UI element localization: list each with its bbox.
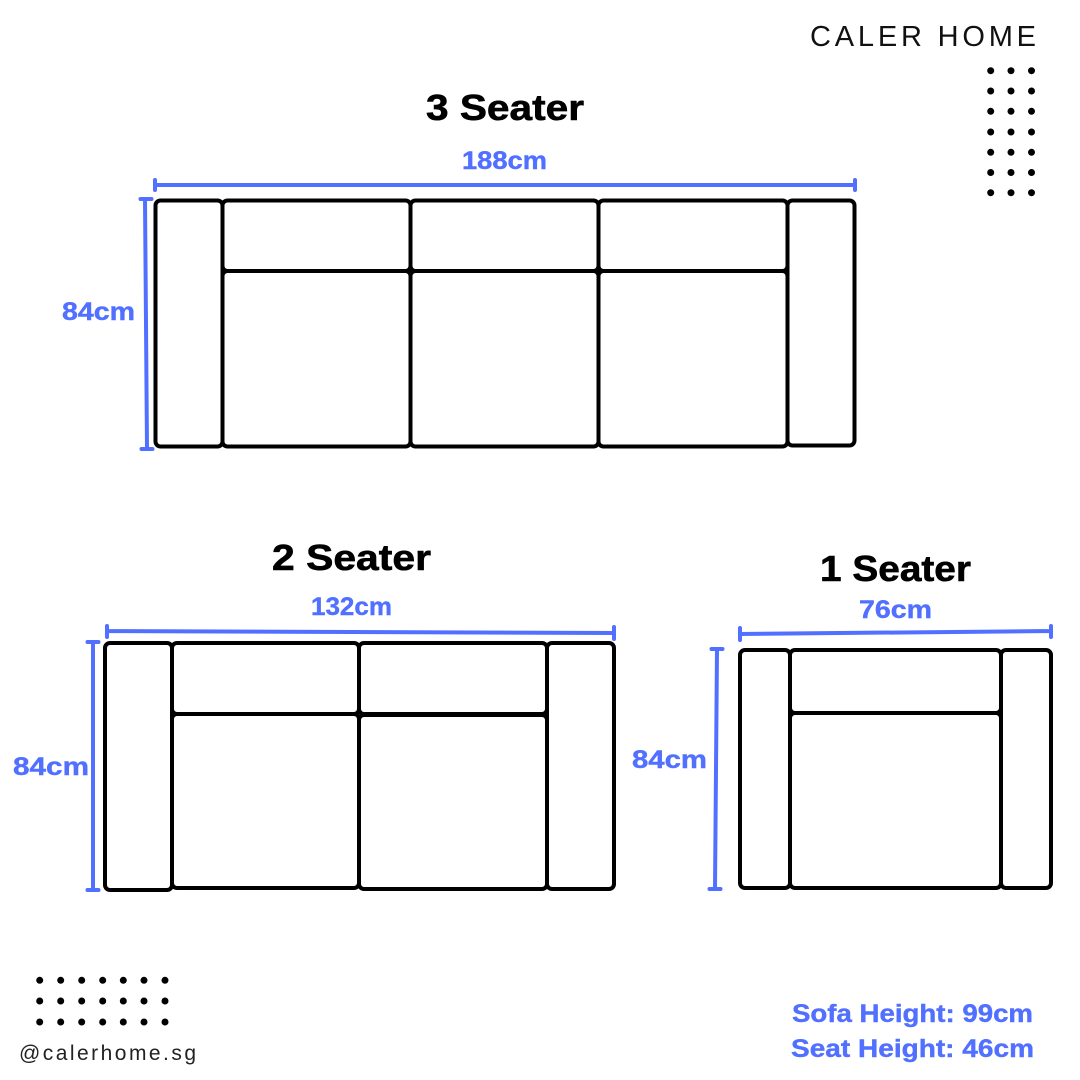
brand name: CALER HOME <box>810 21 1036 53</box>
width label: 76cm: 76cm <box>859 596 932 624</box>
heading: 3 Seater: 3 Seater <box>426 87 584 128</box>
width dimension line: 2 seater <box>107 626 614 639</box>
width dimension line: 1 seater <box>740 626 1051 640</box>
social handle: @calerhome.sg <box>19 1042 196 1065</box>
seat height note: Seat Height: 46cm <box>791 1035 1034 1063</box>
heading: 2 Seater: 2 Seater <box>272 537 431 578</box>
heading: 1 Seater: 1 Seater <box>820 548 971 589</box>
width dimension line: 3 seater <box>155 180 855 190</box>
height dimension line: 2 seater <box>88 642 98 890</box>
height label: 1 seater 84cm: 84cm <box>632 746 707 774</box>
width label: 188cm: 188cm <box>462 147 547 175</box>
width label: 132cm: 132cm <box>311 593 392 621</box>
height dimension line: 1 seater <box>710 649 722 889</box>
sofa diagram: 2 seater <box>105 643 614 890</box>
height dimension line: 3 seater <box>140 199 152 449</box>
dots top right <box>987 67 1035 196</box>
height label: 3 seater 84cm: 84cm <box>62 298 135 326</box>
sofa diagram: 3 seater <box>156 200 854 446</box>
sofa diagram: 1 seater <box>740 650 1051 888</box>
height label: 2 seater 84cm: 84cm <box>13 753 89 781</box>
dots bottom left <box>36 977 169 1026</box>
sofa height note: Sofa Height: 99cm <box>792 1000 1033 1028</box>
